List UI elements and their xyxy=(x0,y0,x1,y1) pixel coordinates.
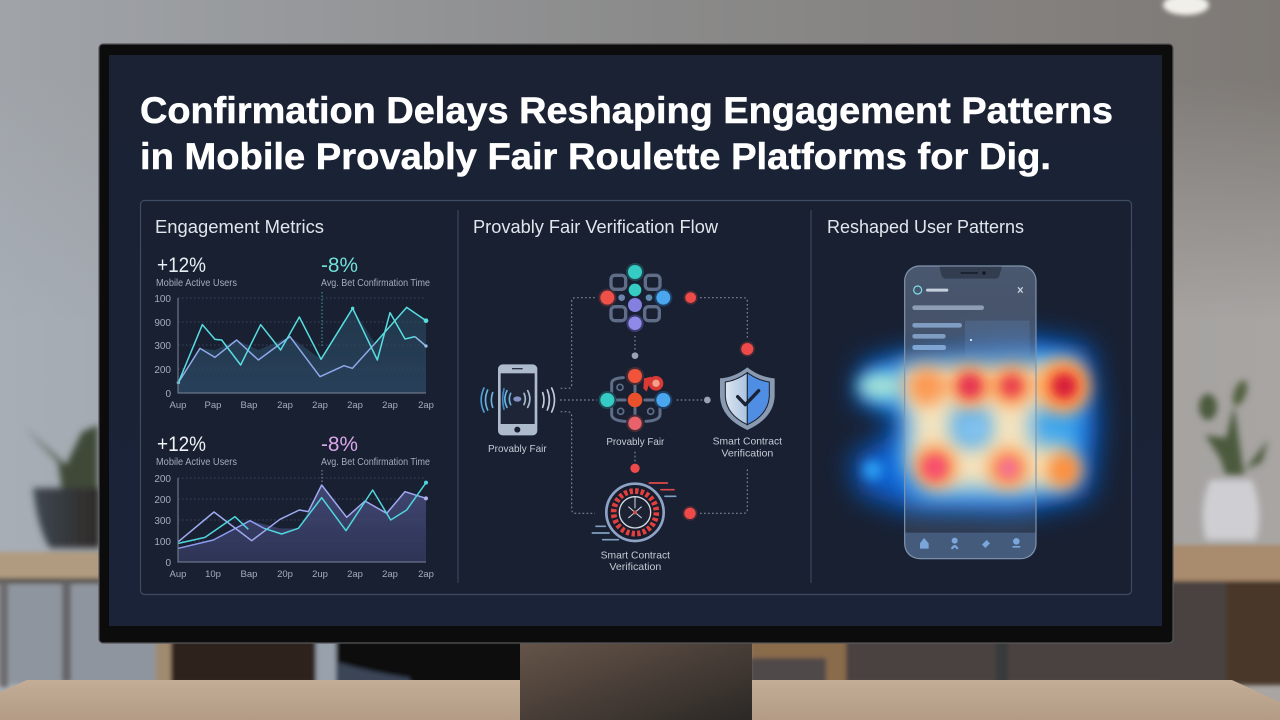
line chart: bottom: 20p xyxy=(277,569,293,580)
line chart: top: 2ap xyxy=(382,400,398,411)
heatmap over phone xyxy=(852,266,1098,559)
line chart: bottom: 200 xyxy=(154,495,171,506)
stat: average bet confirmation time: Avg. Bet Confirmation Time xyxy=(321,277,430,289)
line chart: bottom: 2ap xyxy=(382,569,398,580)
line chart: top: 2ap xyxy=(418,400,434,411)
line chart: bottom: 100 xyxy=(154,537,171,548)
line chart: bottom: 300 xyxy=(154,516,171,527)
heat glow xyxy=(852,333,1098,513)
title xyxy=(140,90,1113,177)
right side table xyxy=(1165,545,1280,685)
dashboard panel frame xyxy=(140,200,1132,594)
dotted connectors xyxy=(560,298,747,513)
line chart: top: 2ap xyxy=(347,400,363,411)
ceiling lamp xyxy=(1163,0,1209,15)
panel: provably fair verification flow xyxy=(473,217,782,573)
line chart: bottom: Aup xyxy=(170,569,186,580)
line chart: top: 100 xyxy=(154,294,171,305)
line chart: top: Bap xyxy=(241,400,257,411)
left side table xyxy=(0,552,160,687)
stat: mobile active users, second xyxy=(156,433,237,468)
stat: average bet confirmation time xyxy=(321,254,430,289)
phone outline xyxy=(905,266,1036,559)
stat: mobile active users: +12% xyxy=(157,254,206,277)
icon: roulette wheel xyxy=(592,483,676,541)
label: smart contract verification, shield: Smart Contract xyxy=(713,437,782,448)
label: smart contract verification, wheel: Smart Contract xyxy=(601,551,670,562)
line chart: bottom: 200 xyxy=(154,474,171,485)
line chart: top: Aup xyxy=(170,400,186,411)
line chart: top: 0 xyxy=(165,389,171,400)
label: provably fair, cluster: Provably Fair xyxy=(606,437,665,448)
monitor xyxy=(99,44,1173,643)
stat: average bet confirmation time: -8% xyxy=(321,254,358,277)
line chart: bottom: 2ap xyxy=(347,569,363,580)
label: smart contract verification, shield xyxy=(713,437,782,460)
monitor stand xyxy=(520,640,752,720)
line chart: top: 300 xyxy=(154,341,171,352)
line chart: top: 900 xyxy=(154,318,171,329)
title: in Mobile Provably Fair Roulette Platforms for Dig. xyxy=(140,136,1051,177)
stat: mobile active users xyxy=(156,254,237,289)
line chart: top: 200 xyxy=(154,365,171,376)
heading: verification flow: Provably Fair Verification Flow xyxy=(473,217,719,237)
line chart: bottom: 2up xyxy=(312,569,328,580)
line chart: bottom: 0 xyxy=(165,558,171,569)
icon: phone with signal waves xyxy=(481,364,554,435)
label: provably fair, phone: Provably Fair xyxy=(488,444,547,455)
line chart: bottom: 2ap xyxy=(418,569,434,580)
label: smart contract verification, shield: Verification xyxy=(721,449,773,460)
line chart: top: 2ap xyxy=(277,400,293,411)
line chart: bottom: 10p xyxy=(205,569,221,580)
line chart: top xyxy=(154,292,434,411)
icon: shield with check xyxy=(720,367,775,430)
label: smart contract verification, wheel xyxy=(601,551,670,573)
panel: engagement metrics xyxy=(154,217,434,580)
line chart: bottom xyxy=(154,470,434,580)
panel: reshaped user patterns xyxy=(827,217,1098,559)
flow diagram xyxy=(481,263,782,573)
line chart: top: Pap xyxy=(205,400,221,411)
furniture behind the monitor xyxy=(156,640,1176,684)
line chart: bottom: Bap xyxy=(241,569,257,580)
desk surface xyxy=(0,680,1280,720)
line chart: top: 2ap xyxy=(312,400,328,411)
stat: mobile active users, second: Mobile Active Users xyxy=(156,456,237,468)
nav icons xyxy=(920,538,1020,549)
stat: average bet confirmation time, second xyxy=(321,433,430,468)
label: smart contract verification, wheel: Verification xyxy=(609,562,661,573)
stat: average bet confirmation time, second: -8% xyxy=(321,433,358,456)
right plant and vase xyxy=(1199,379,1268,540)
icon: top node cluster xyxy=(598,263,672,332)
left plant xyxy=(25,425,100,548)
stat: mobile active users: Mobile Active Users xyxy=(156,277,237,289)
heading: reshaped user patterns: Reshaped User Patterns xyxy=(827,217,1024,237)
heading: engagement metrics: Engagement Metrics xyxy=(155,217,324,237)
stat: average bet confirmation time, second: Avg. Bet Confirmation Time xyxy=(321,456,430,468)
stat: mobile active users, second: +12% xyxy=(157,433,206,456)
icon: middle node cluster xyxy=(598,367,672,432)
title: Confirmation Delays Reshaping Engagement Patterns xyxy=(140,90,1113,131)
